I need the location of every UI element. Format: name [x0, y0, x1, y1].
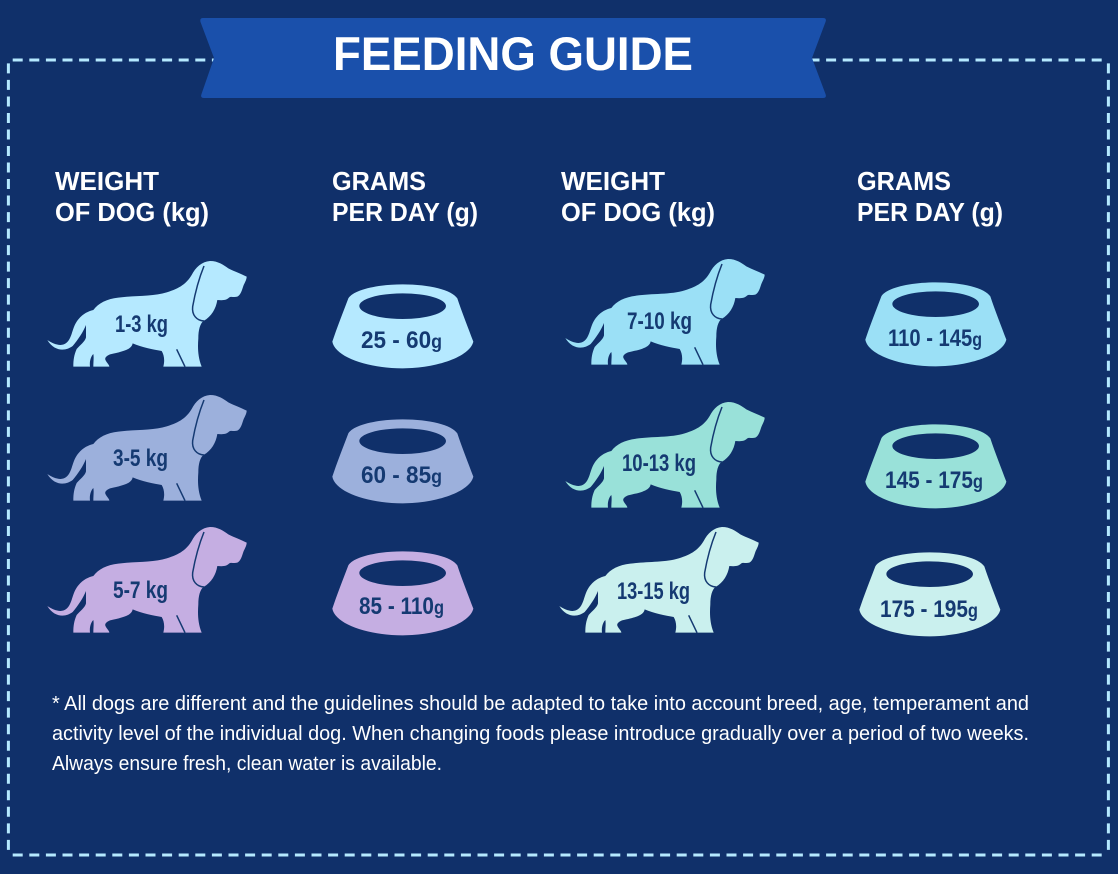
bowl: 25 - 60g — [332, 284, 473, 368]
dog: 1-3 kg: 1-3 kg — [115, 311, 168, 338]
bowl: 85 - 110g: 85 - 110g — [359, 593, 444, 620]
dog: 3-5 kg — [47, 395, 247, 501]
bowl: 145 - 175g — [865, 424, 1006, 508]
title banner — [200, 18, 826, 98]
column heading: weight of dog, right — [561, 166, 715, 227]
column heading: weight of dog, left: WEIGHT — [55, 166, 159, 196]
dog: 5-7 kg: 5-7 kg — [113, 577, 168, 604]
footnote text: Always ensure fresh, clean water is available. — [52, 753, 442, 775]
column heading: grams per day, left — [332, 166, 478, 227]
bowl: 110 - 145g: 110 - 145g — [888, 325, 982, 352]
footnote text — [52, 693, 1029, 775]
bowl: 60 - 85g: 60 - 85g — [361, 462, 442, 489]
bowl: 145 - 175g: 145 - 175g — [885, 467, 983, 494]
column heading: grams per day, right: PER DAY (g) — [857, 197, 1003, 227]
dog: 10-13 kg — [565, 402, 765, 508]
dog: 13-15 kg — [559, 527, 759, 633]
dog: 7-10 kg — [565, 259, 765, 365]
column heading: grams per day, right — [857, 166, 1003, 227]
bowl: 175 - 195g: 175 - 195g — [880, 596, 978, 623]
dog: 13-15 kg: 13-15 kg — [617, 578, 690, 605]
column heading: grams per day, left: GRAMS — [332, 166, 426, 196]
column heading: grams per day, left: PER DAY (g) — [332, 197, 478, 227]
title: FEEDING GUIDE — [333, 27, 693, 80]
dog: 3-5 kg: 3-5 kg — [113, 445, 168, 472]
bowl: 175 - 195g — [859, 552, 1000, 636]
column heading: weight of dog, left — [55, 166, 209, 227]
dog: 7-10 kg: 7-10 kg — [627, 308, 692, 335]
bowl: 25 - 60g: 25 - 60g — [361, 327, 442, 354]
column heading: weight of dog, left: OF DOG (kg) — [55, 197, 209, 227]
bowl: 60 - 85g — [332, 419, 473, 503]
column heading: weight of dog, right: WEIGHT — [561, 166, 665, 196]
dog: 1-3 kg — [47, 261, 247, 367]
bowl: 110 - 145g — [865, 282, 1006, 366]
column heading: grams per day, right: GRAMS — [857, 166, 951, 196]
dog: 5-7 kg — [47, 527, 247, 633]
footnote text: activity level of the individual dog. When changing foods please introduce gradually over a period of two weeks. — [52, 723, 1029, 745]
footnote text: * All dogs are different and the guidelines should be adapted to take into account breed, age, temperament and — [52, 693, 1029, 715]
bowl: 85 - 110g — [332, 551, 473, 635]
column heading: weight of dog, right: OF DOG (kg) — [561, 197, 715, 227]
dog: 10-13 kg: 10-13 kg — [622, 450, 696, 477]
